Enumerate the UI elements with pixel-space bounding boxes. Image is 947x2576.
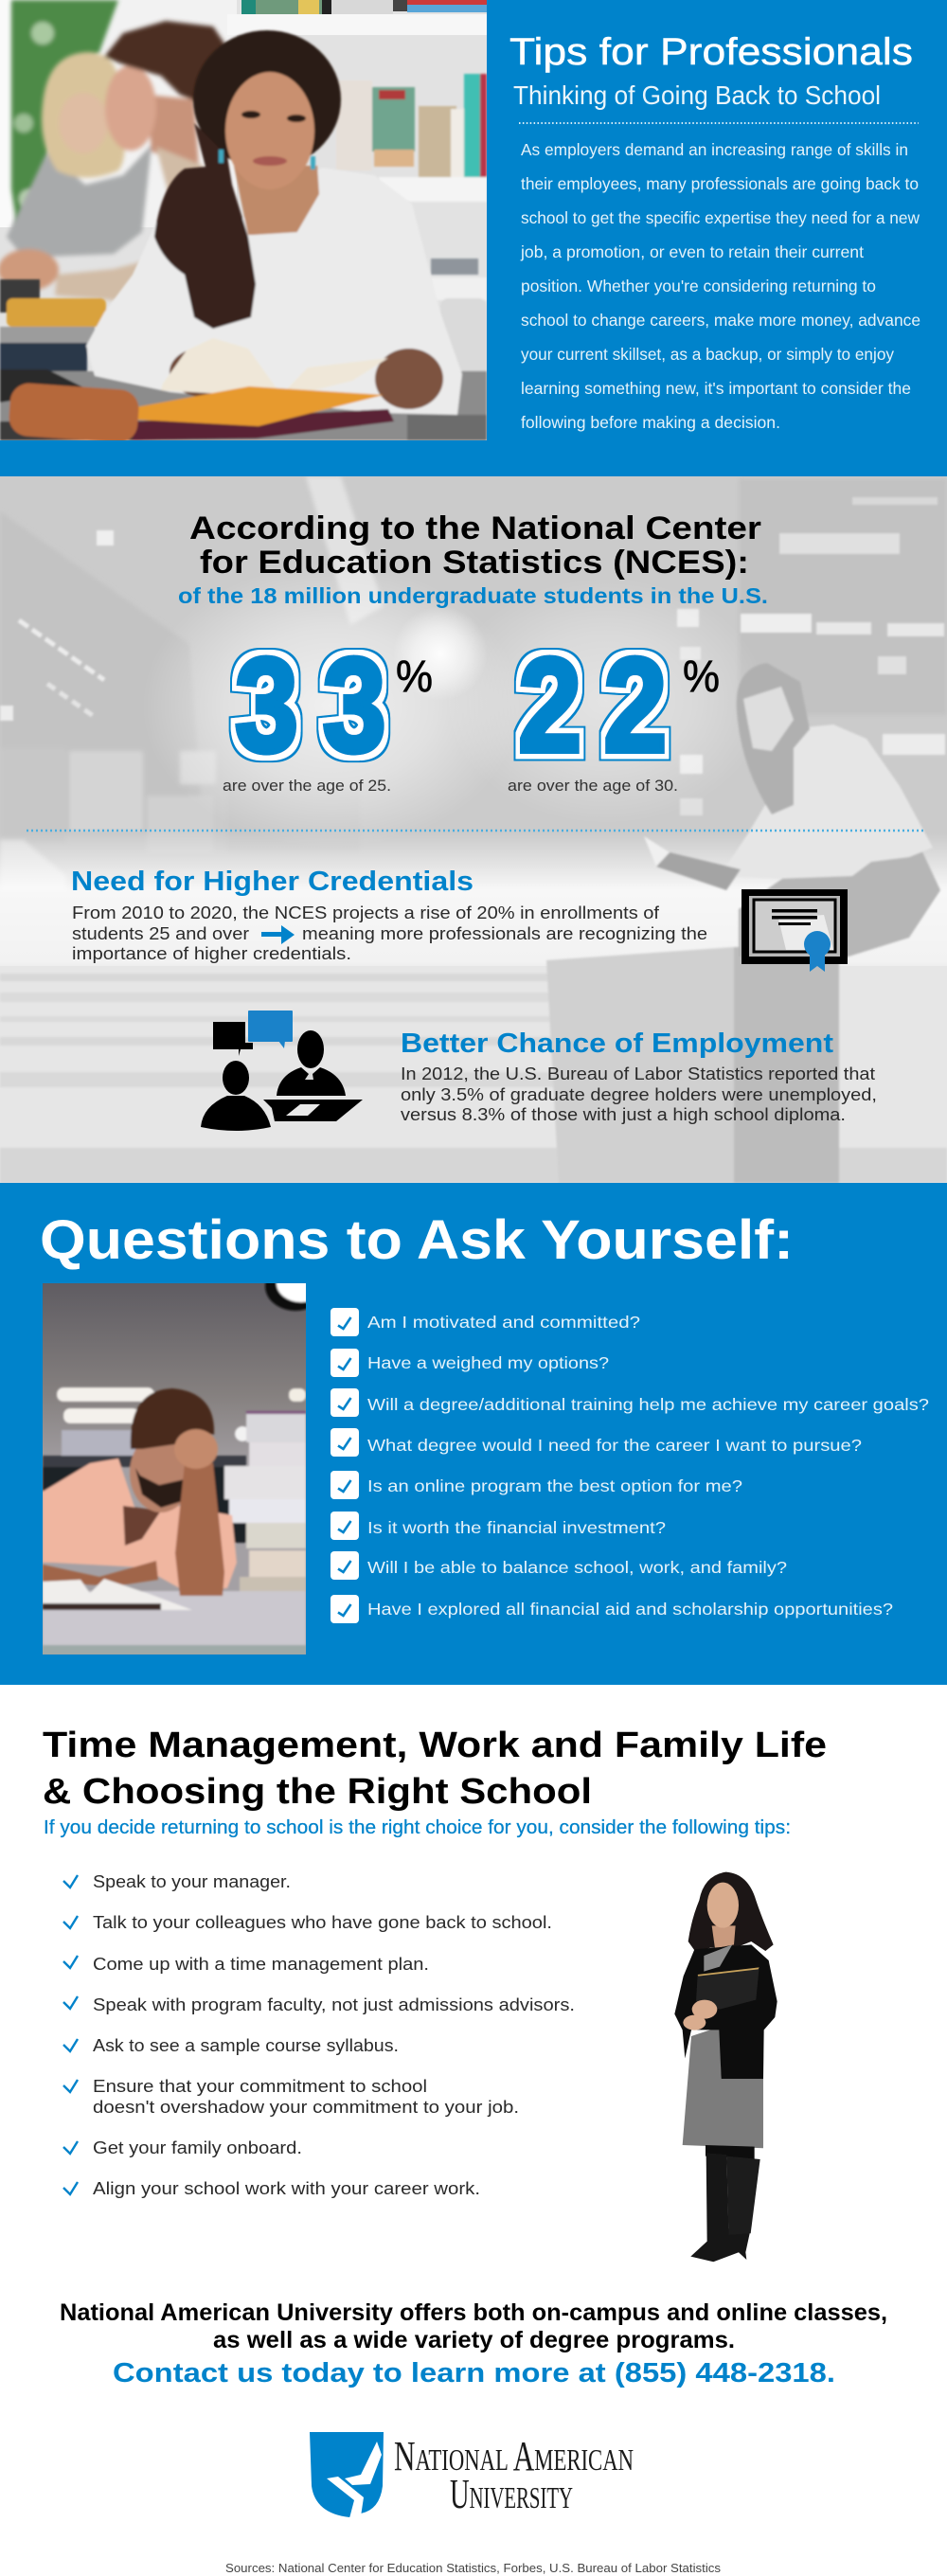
subheading: tips intro: If you decide returning to school is the right choice for you, consider the following tips: [44, 1817, 791, 1838]
tip 6 [63, 2077, 519, 2117]
question 1 [331, 1308, 640, 1336]
question 2 [331, 1349, 609, 1377]
statistic: 22 percent [508, 631, 720, 795]
closing call to action: National American University offers both on-campus and online classes, [60, 2299, 887, 2326]
question 5 [331, 1471, 742, 1499]
question 8: Have I explored all financial aid and scholarship opportunities? [367, 1600, 893, 1619]
question 2: Have a weighed my options? [367, 1353, 609, 1372]
question 7 [331, 1551, 787, 1580]
photo: tired man studying beside stacked books [43, 1283, 306, 1655]
question 4 [331, 1428, 862, 1457]
heading: time management: Time Management, Work and Family Life [43, 1726, 827, 1765]
tip 1: Speak to your manager. [93, 1872, 291, 1891]
statistic: 22 percent: % [683, 651, 720, 701]
heading: According to the National Center [189, 510, 761, 581]
question 4: What degree would I need for the career I want to pursue? [367, 1436, 862, 1455]
closing call to action [60, 2299, 887, 2388]
statistic: 33 percent: % [396, 651, 433, 701]
icon: diploma certificate [742, 889, 848, 972]
intro paragraph: school to get the specific expertise they need for a new [521, 208, 920, 227]
heading: time management [43, 1726, 827, 1812]
heading: Tips for Professionals: Tips for Professionals [509, 31, 913, 73]
panel: questions to ask yourself [0, 1183, 947, 1685]
heading: According to the National Center: According to the National Center [189, 510, 761, 546]
block: better chance of employment: Better Chance of Employment [401, 1029, 833, 1059]
block: need for higher credentials: meaning more professionals are recognizing the [302, 924, 707, 943]
checklist: tips [63, 1872, 575, 2198]
wordmark [394, 2433, 634, 2517]
panel: intro text block [509, 31, 920, 432]
question 5: Is an online program the best option for me? [367, 1476, 742, 1495]
photo: standing woman holding a folder [674, 1872, 777, 2262]
block: need for higher credentials: importance of higher credentials. [72, 944, 351, 963]
intro paragraph: their employees, many professionals are going back to [521, 174, 919, 193]
block: better chance of employment: versus 8.3% of those with just a high school diploma. [401, 1105, 846, 1124]
question 7: Will I be able to balance school, work, and family? [367, 1558, 787, 1577]
intro paragraph: job, a promotion, or even to retain their current [520, 242, 864, 261]
question 3 [331, 1388, 929, 1417]
question 3: Will a degree/additional training help me achieve my career goals? [367, 1395, 929, 1414]
panel: grey city background photo [0, 476, 947, 1183]
intro paragraph: learning something new, it's important to consider the [521, 379, 911, 398]
block: need for higher credentials [71, 867, 707, 963]
intro paragraph: your current skillset, as a backup, or simply to enjoy [521, 345, 894, 364]
photo: students studying in a library [0, 0, 487, 444]
question 8 [331, 1595, 893, 1623]
statistic: 22 percent: 22 [518, 631, 667, 779]
tip 6: doesn't overshadow your commitment to your job. [93, 2098, 519, 2117]
statistic: 33 percent [223, 631, 433, 795]
arrow [261, 925, 295, 944]
tip 6: Ensure that your commitment to school [93, 2077, 427, 2096]
tip 2: Talk to your colleagues who have gone back to school. [93, 1913, 552, 1932]
icon: shield [310, 2432, 384, 2518]
closing call to action: as well as a wide variety of degree programs. [213, 2327, 735, 2353]
checklist: eight questions [331, 1308, 929, 1623]
wordmark: UNIVERSITY [450, 2471, 573, 2517]
statistic: 22 percent: are over the age of 30. [508, 777, 678, 795]
subheading: Thinking of Going Back to School: Thinking of Going Back to School [513, 80, 881, 110]
block: need for higher credentials: students 25 and over [72, 924, 249, 943]
heading: Questions to Ask Yourself: Questions to Ask Yourself: [40, 1209, 794, 1271]
tip 7: Get your family onboard. [93, 2138, 302, 2157]
block: need for higher credentials: From 2010 to 2020, the NCES projects a rise of 20% in enrollments of [72, 903, 660, 922]
panel: blue intro background [0, 0, 947, 476]
block: better chance of employment [401, 1029, 877, 1124]
icon: two people talking at a desk [201, 1011, 363, 1131]
question 1: Am I motivated and committed? [367, 1313, 640, 1332]
heading: According to the National Center: for Education Statistics (NCES): [200, 545, 749, 581]
panel: white tips section background [0, 1685, 947, 2576]
intro paragraph [520, 140, 920, 432]
intro paragraph: following before making a decision. [521, 413, 780, 432]
intro paragraph: position. Whether you're considering returning to [521, 277, 876, 295]
tip 5: Ask to see a sample course syllabus. [93, 2036, 399, 2055]
tip 8: Align your school work with your career work. [93, 2179, 480, 2198]
logo: National American University [310, 2432, 634, 2518]
statistic: 33 percent: 33 [235, 631, 386, 779]
tip 4: Speak with program faculty, not just admissions advisors. [93, 1995, 575, 2014]
intro paragraph: As employers demand an increasing range of skills in [521, 140, 908, 159]
heading: time management: & Choosing the Right School [43, 1772, 592, 1812]
statistic: 33 percent: are over the age of 25. [223, 777, 391, 795]
question 6 [331, 1512, 666, 1540]
question 6: Is it worth the financial investment? [367, 1518, 666, 1537]
panel: NCES statistics [27, 510, 923, 1131]
tip 3: Come up with a time management plan. [93, 1955, 429, 1974]
block: need for higher credentials: Need for Higher Credentials [71, 867, 474, 897]
closing call to action: Contact us today to learn more at (855) 448-2318. [113, 2358, 835, 2388]
sources: Sources: National Center for Education Statistics, Forbes, U.S. Bureau of Labor Statistics [225, 2562, 721, 2575]
intro paragraph: school to change careers, make more money, advance [521, 311, 920, 330]
block: better chance of employment: only 3.5% of graduate degree holders were unemployed, [401, 1085, 877, 1104]
wordmark: NATIONAL AMERICAN [394, 2433, 634, 2479]
photo: woman reading on a suitcase [546, 663, 940, 1183]
subheading: 18 million undergraduates: of the 18 million undergraduate students in the U.S. [178, 583, 768, 608]
block: better chance of employment: In 2012, the U.S. Bureau of Labor Statistics reported that [401, 1064, 875, 1083]
